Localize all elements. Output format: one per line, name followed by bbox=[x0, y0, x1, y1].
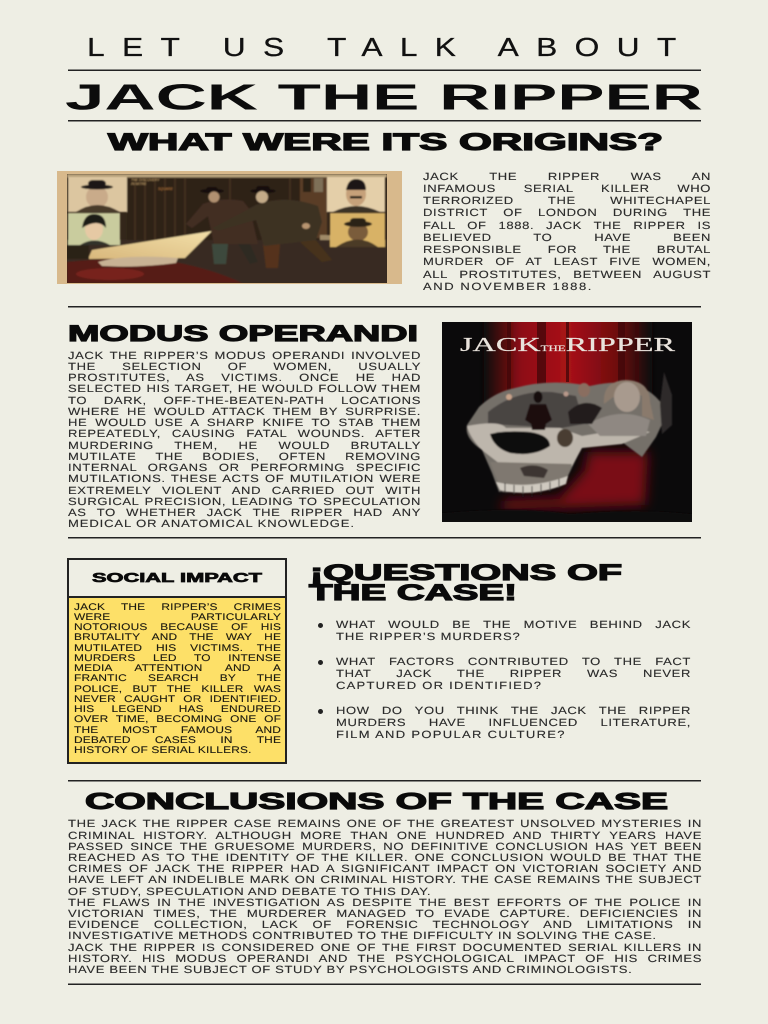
text block: conclusions: HISTORY. HIS MODUS OPERANDI AND THE PSYCHOLOGICAL IMPACT OF HIS CRIMES bbox=[68, 953, 702, 965]
heading: questions of the case: ¡QUESTIONS OF bbox=[310, 560, 622, 585]
title: let us talk about: LET US TALK ABOUT bbox=[87, 34, 677, 62]
panel text: BRUTALITY AND THE WAY HE bbox=[74, 632, 281, 643]
street lamp glow bbox=[506, 394, 512, 400]
text block: conclusions: HAVE LEFT AN INDELIBLE MARK ON CRIMINAL HISTORY. THE CASE REMAINS THE SUBJECT bbox=[68, 874, 702, 886]
panel text: NOTORIOUS BECAUSE OF HIS bbox=[74, 622, 281, 633]
silhouette of the ripper bbox=[534, 391, 542, 403]
text block: modus operandi: AS TO WHETHER JACK THE RIPPER HAD ANY bbox=[68, 507, 421, 519]
text block: origins: MURDER OF AT LEAST FIVE WOMEN, bbox=[423, 256, 711, 268]
text block: modus operandi: INTERNAL ORGANS OR PERFORMING SPECIFIC bbox=[68, 462, 421, 474]
church spire bbox=[660, 372, 672, 434]
text block: origins: AND NOVEMBER 1888. bbox=[423, 281, 593, 293]
text block: modus operandi: TO DARK, OFF-THE-BEATEN-PATH LOCATIONS bbox=[68, 395, 421, 407]
text block: conclusions: EVIDENCE COLLECTION, LACK OF FORENSIC TECHNOLOGY AND LIMITATIONS IN bbox=[68, 919, 702, 931]
panel text: POLICE, BUT THE KILLER WAS bbox=[74, 684, 281, 695]
text block: conclusions: HAVE BEEN THE SUBJECT OF STUDY BY PSYCHOLOGISTS AND CRIMINOLOGISTS. bbox=[68, 964, 632, 976]
eye socket bbox=[490, 431, 550, 454]
text block: modus operandi: MUTILATE THE BODIES, OFTEN REMOVING bbox=[68, 451, 421, 463]
text block: modus operandi: MEDICAL OR ANATOMICAL KNOWLEDGE. bbox=[68, 518, 355, 530]
heading: conclusions of the case: CONCLUSIONS OF THE CASE bbox=[85, 788, 668, 814]
panel text: MURDERS LED TO INTENSE bbox=[74, 653, 281, 664]
text block: modus operandi bbox=[68, 350, 421, 530]
question 1 bbox=[318, 619, 691, 643]
panel: social impact bbox=[67, 558, 287, 764]
panel text: NEVER CAUGHT OR IDENTIFIED. bbox=[74, 694, 281, 705]
question 3: FILM AND POPULAR CULTURE? bbox=[336, 729, 566, 741]
skull dome with scene bbox=[467, 382, 664, 492]
question 2: WHAT FACTORS CONTRIBUTED TO THE FACT bbox=[336, 656, 691, 668]
text block: origins: TERRORIZED THE WHITECHAPEL bbox=[423, 195, 711, 207]
policemen figures bbox=[186, 186, 332, 268]
text block: modus operandi: REPEATEDLY, CAUSING FATAL WOUNDS. AFTER bbox=[68, 428, 421, 440]
panel text: HISTORY OF SERIAL KILLERS. bbox=[74, 745, 252, 756]
text block: modus operandi: WHERE HE WOULD ATTACK THEM BY SURPRISE. bbox=[68, 406, 421, 418]
heading: modus operandi: MODUS OPERANDI bbox=[68, 321, 418, 346]
question 3: HOW DO YOU THINK THE JACK THE RIPPER bbox=[336, 705, 691, 717]
text block: modus operandi: JACK THE RIPPER’S MODUS OPERANDI INVOLVED bbox=[68, 350, 421, 362]
bone around the eye socket bbox=[467, 423, 650, 470]
text block: modus operandi: SELECTED HIS TARGET, HE WOULD FOLLOW THEM bbox=[68, 383, 421, 395]
text block: modus operandi: EXTREMELY VIOLENT AND CARRIED OUT WITH bbox=[68, 485, 421, 497]
text block: origins: JACK THE RIPPER WAS AN bbox=[423, 170, 711, 182]
text block: conclusions: CRIMES OF JACK THE RIPPER HAD A SIGNIFICANT IMPACT ON VICTORIAN SOCIETY AND bbox=[68, 863, 702, 875]
panel text: HIS LEGEND HAS ENDURED bbox=[74, 704, 281, 715]
question 2: CAPTURED OR IDENTIFIED? bbox=[336, 680, 542, 692]
title: jack the ripper: JACK THE RIPPER bbox=[65, 76, 703, 118]
text block: conclusions bbox=[68, 818, 702, 976]
victim on the ground bbox=[67, 259, 242, 283]
text block: origins: FALL OF 1888. JACK THE RIPPER IS bbox=[423, 220, 711, 232]
text block: origins: INFAMOUS SERIAL KILLER WHO bbox=[423, 183, 711, 195]
poster title: JACK THE RIPPER bbox=[460, 334, 676, 356]
question 3 bbox=[318, 705, 691, 741]
portrait panels bbox=[68, 177, 385, 247]
skull bbox=[467, 372, 672, 497]
teeth bbox=[496, 476, 568, 493]
panel text: DEBATED CASES IN THE bbox=[74, 735, 281, 746]
text block: modus operandi: MUTILATIONS. THESE ACTS OF MUTILATION WERE bbox=[68, 473, 421, 485]
woman's face bbox=[604, 380, 654, 420]
text block: modus operandi: PROSTITUTES, AS VICTIMS. ONCE HE HAD bbox=[68, 372, 421, 384]
heading: questions of the case: THE CASE! bbox=[309, 580, 517, 605]
image: whitechapel murders illustrated newspaper page: SQUARE bbox=[158, 187, 173, 191]
text block: origins: RESPONSIBLE FOR THE BRUTAL bbox=[423, 244, 711, 256]
text block: modus operandi: MURDERING THEM, HE WOULD BRUTALLY bbox=[68, 440, 421, 452]
text block: origins: DISTRICT OF LONDON DURING THE bbox=[423, 207, 711, 219]
image: whitechapel murders illustrated newspaper page: IN MITRE bbox=[131, 182, 147, 186]
question 3: MURDERS HAVE INFLUENCED LITERATURE, bbox=[336, 717, 691, 729]
panel heading: social impact bbox=[69, 560, 285, 598]
panel text: WERE PARTICULARLY bbox=[74, 612, 281, 623]
text block: conclusions: VICTORIAN TIMES, THE MURDERER MANAGED TO EVADE CAPTURE. DEFICIENCIES IN bbox=[68, 908, 702, 920]
text block: conclusions: REACHED AS TO THE IDENTITY OF THE KILLER. ONE CONCLUSION WOULD BE THAT THE bbox=[68, 852, 702, 864]
text block: modus operandi: HE WOULD USE A SHARP KNIFE TO STAB THEM bbox=[68, 417, 421, 429]
text block: conclusions: CRIMINAL HISTORY. ALTHOUGH MORE THAN ONE HUNDRED AND THIRTY YEARS HAVE bbox=[68, 830, 702, 842]
image: jack the ripper film poster with skull bbox=[442, 316, 692, 522]
heading: questions of the case bbox=[309, 560, 622, 605]
question 2 bbox=[318, 656, 691, 692]
text block: conclusions: THE JACK THE RIPPER CASE REMAINS ONE OF THE GREATEST UNSOLVED MYSTERIES IN bbox=[68, 818, 702, 830]
text block: origins: BELIEVED TO HAVE BEEN bbox=[423, 232, 711, 244]
heading: what were its origins: WHAT WERE ITS ORIGINS? bbox=[108, 129, 663, 156]
text block: origins bbox=[423, 170, 711, 293]
nose and jaw bbox=[490, 462, 572, 492]
panel text: MUTILATED HIS VICTIMS. THE bbox=[74, 643, 281, 654]
text block: conclusions: JACK THE RIPPER IS CONSIDERED ONE OF THE FIRST DOCUMENTED SERIAL KILLERS IN bbox=[68, 942, 702, 954]
text block: modus operandi: THE SELECTION OF WOMEN, USUALLY bbox=[68, 361, 421, 373]
text block: conclusions: THE FLAWS IN THE INVESTIGATION AS DESPITE THE BEST EFFORTS OF THE POLICE IN bbox=[68, 897, 702, 909]
question 1: WHAT WOULD BE THE MOTIVE BEHIND JACK bbox=[336, 619, 691, 631]
text block: conclusions: PASSED SINCE THE GRUESOME MURDERS, NO DEFINITIVE CONCLUSION HAS YET BEEN bbox=[68, 841, 702, 853]
panel heading: social impact: SOCIAL IMPACT bbox=[92, 571, 263, 585]
question list bbox=[318, 619, 691, 741]
panel text: JACK THE RIPPER’S CRIMES bbox=[74, 602, 281, 612]
panel text: OVER TIME, BECOMING ONE OF bbox=[74, 714, 281, 725]
text block: conclusions: OF STUDY, SPECULATION AND DEBATE TO THIS DAY. bbox=[68, 886, 431, 898]
panel text: THE MOST FAMOUS AND bbox=[74, 725, 281, 736]
image: whitechapel murders illustrated newspaper page bbox=[57, 171, 402, 284]
man in the background bbox=[578, 383, 590, 397]
text block: conclusions: INVESTIGATIVE METHODS CONTRIBUTED TO THE DIFFICULTY IN SOLVING THE CASE. bbox=[68, 930, 657, 942]
text block: modus operandi: SURGICAL PRECISION, LEADING TO SPECULATION bbox=[68, 496, 421, 508]
text block: origins: ALL PROSTITUTES, BETWEEN AUGUST bbox=[423, 269, 711, 281]
panel text: MEDIA ATTENTION AND A bbox=[74, 663, 281, 674]
panel text: FRANTIC SEARCH BY THE bbox=[74, 673, 281, 684]
panel text bbox=[74, 602, 281, 756]
caption text in the illustration: THE DISCOVERY bbox=[131, 178, 160, 182]
question 1: THE RIPPER’S MURDERS? bbox=[336, 631, 521, 643]
question 2: THAT JACK THE RIPPER WAS NEVER bbox=[336, 668, 691, 680]
